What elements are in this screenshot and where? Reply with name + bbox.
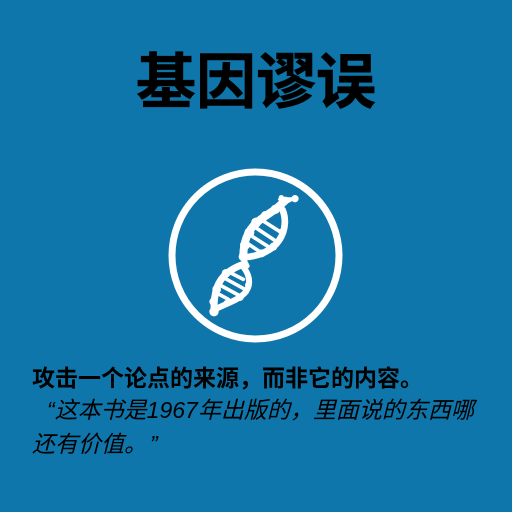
text block: definition: 攻击一个论点的来源，而非它的内容。 <box>32 365 423 391</box>
text block: example quote: “这本书是1967年出版的，里面说的东西哪 <box>47 397 474 423</box>
text block: example quote: 还有价值。” <box>32 431 158 457</box>
title: 基因谬误 <box>136 49 376 116</box>
text block: example quote <box>32 397 478 457</box>
